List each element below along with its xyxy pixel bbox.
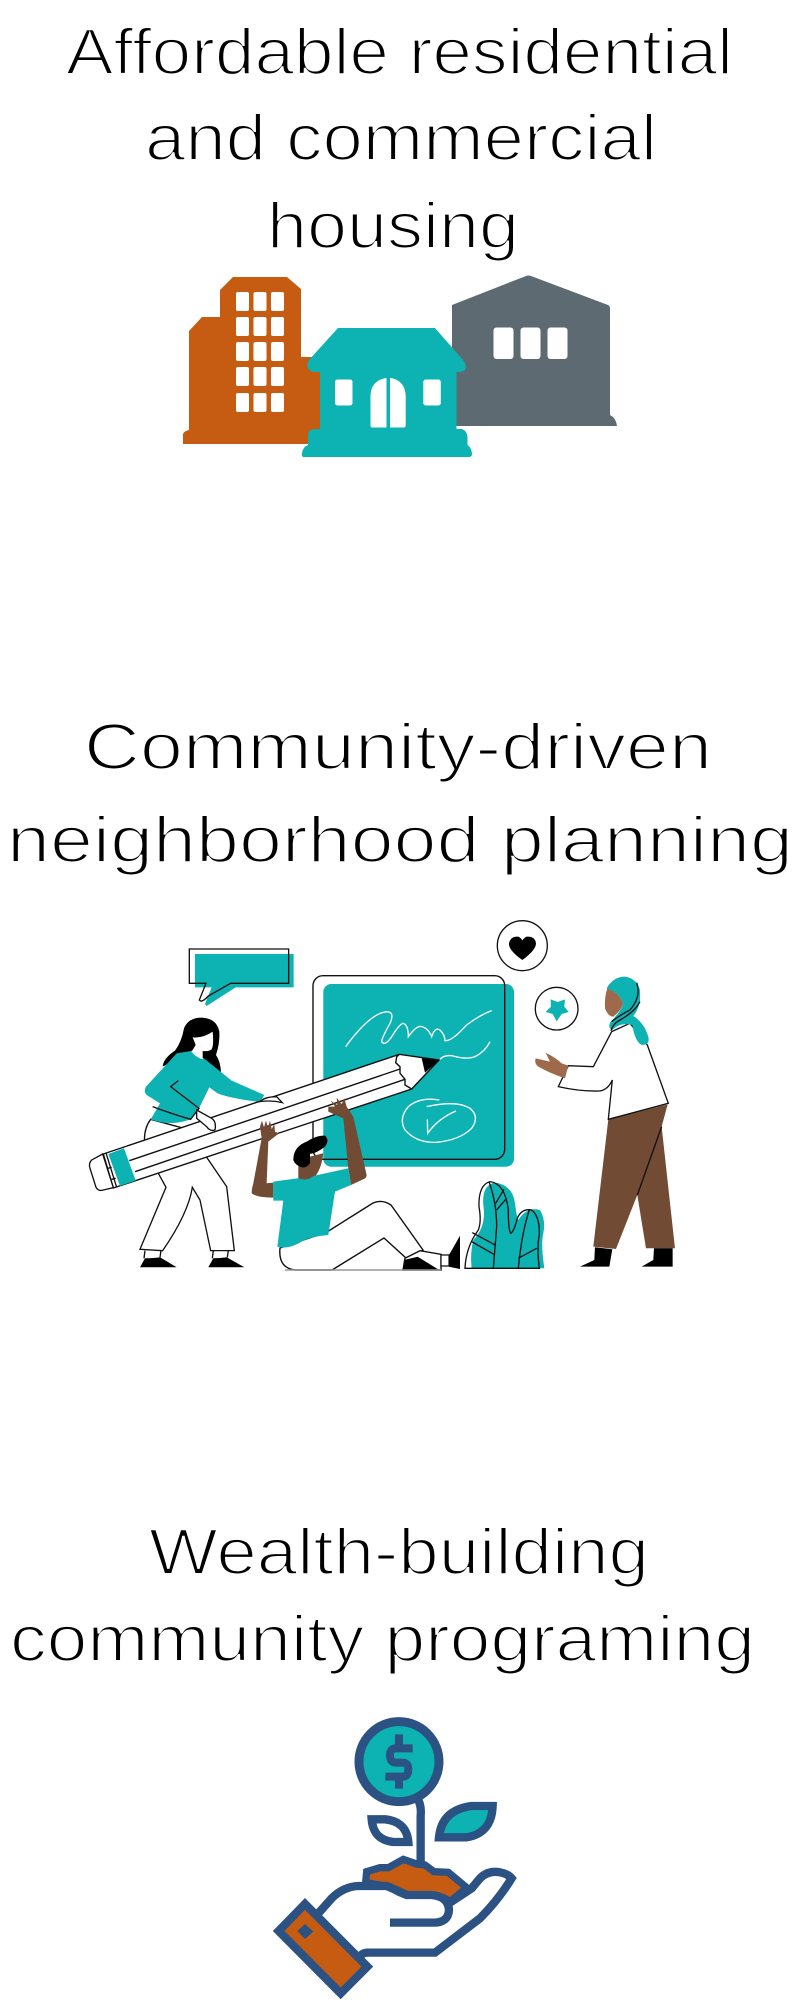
heading: community programing: Wealth-building <box>149 1515 649 1588</box>
teal house <box>302 328 472 457</box>
heading: affordable housing: Affordable residential <box>66 15 733 88</box>
star badge <box>535 987 578 1030</box>
giant pencil <box>89 1054 439 1190</box>
heading: community programing: community programing <box>10 1602 755 1675</box>
dollar coin <box>359 1722 439 1802</box>
heading: neighborhood planning <box>7 710 793 876</box>
woman in hijab <box>535 977 675 1267</box>
icon: three buildings <box>183 276 617 457</box>
scribbles on board <box>346 1011 492 1142</box>
orange apartment tower <box>183 277 330 444</box>
tablet board <box>313 976 514 1167</box>
grey warehouse <box>452 276 617 426</box>
panel: community programing <box>10 1515 755 1993</box>
left leaf <box>372 1819 408 1842</box>
open hand <box>318 1872 512 1957</box>
shirt cuff <box>279 1904 367 1993</box>
right leaf <box>439 1806 493 1837</box>
speech bubble <box>189 949 294 1006</box>
plant <box>465 1182 544 1268</box>
heading: community programing <box>10 1515 755 1675</box>
heart badge <box>497 921 547 971</box>
soil <box>366 1859 467 1902</box>
panel: affordable housing <box>66 15 733 457</box>
woman holding pencil, upper body and legs <box>140 1018 264 1267</box>
plant stem <box>418 1800 421 1864</box>
heading: affordable housing <box>66 15 733 262</box>
panel: neighborhood planning <box>7 710 793 1270</box>
heading: neighborhood planning: neighborhood planning <box>7 803 793 876</box>
heading: neighborhood planning: Community-driven <box>84 710 712 783</box>
illustration: people planning with giant pencil <box>89 921 675 1270</box>
icon: hand holding money plant <box>279 1722 512 1993</box>
heading: affordable housing: and commercial <box>145 101 657 174</box>
heading: affordable housing: housing <box>267 189 519 262</box>
seated man lifting pencil <box>252 1098 460 1270</box>
